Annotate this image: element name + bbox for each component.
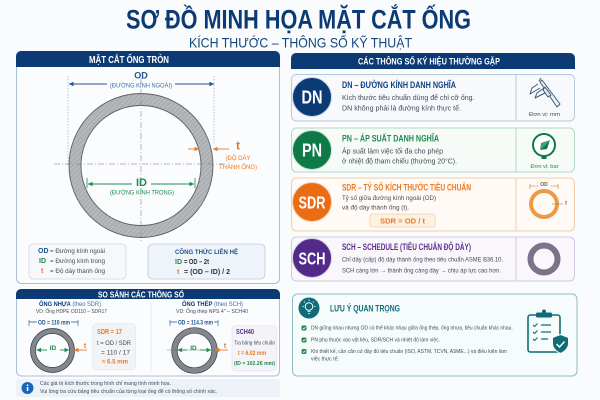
legend box: ID — [39, 258, 46, 265]
plastic pipe heading — [36, 298, 107, 315]
info note — [16, 379, 280, 397]
panel: pipe cross-section — [16, 51, 280, 284]
card: DN: Đơn vị: mm — [529, 112, 560, 118]
card: SCH: SCH càng lớn → thành ống càng dày → chịu áp lực cao hơn. — [342, 266, 501, 275]
right heading: CÁC THÔNG SỐ KÝ HIỆU THƯỜNG GẶP — [358, 56, 501, 68]
SCH40 box: (ID = 102.26 mm) — [234, 361, 275, 367]
comparison heading — [16, 288, 280, 300]
SCH badge — [292, 238, 332, 278]
plastic pipe heading: VD: Ống HDPE OD110 – SDR17 — [36, 308, 107, 315]
SCH40 box: SCH40 — [236, 329, 254, 336]
SDR formula — [370, 214, 435, 227]
steel pipe heading: VD: Ống thép NPS 4" – SCH40 — [176, 308, 248, 315]
ID dimension — [87, 177, 195, 196]
wall thickness t: THÀNH ỐNG) — [219, 164, 257, 171]
icon: caliper — [530, 78, 560, 107]
panel: comparison — [16, 288, 280, 376]
plastic pipe ring: OD = 110 mm — [38, 320, 70, 326]
card: PN — [292, 128, 574, 172]
SDR calculation box — [92, 324, 136, 370]
note list: DN giống nhau nhưng OD có thể khác nhau giữa ống thép, ống nhựa, tiêu chuẩn khác nhau. — [311, 324, 513, 332]
plastic pipe ring: ID — [50, 345, 57, 352]
note list: Khi thiết kế, cần căn cứ đầy đủ tiêu chuẩn (ISO, ASTM, TCVN, ASME...) và điều kiện làm — [311, 348, 507, 355]
legend box: = Đường kính ngoài — [50, 248, 105, 255]
SDR badge: SDR — [298, 192, 326, 212]
panel: important notes — [292, 294, 577, 376]
note list — [302, 324, 513, 363]
SDR calculation box: ≈ 6.5 mm — [102, 358, 128, 366]
card: PN: PN – ÁP SUẤT DANH NGHĨA — [342, 134, 439, 144]
card: SCH: Chỉ dày (cấp) độ dày thành ống theo tiêu chuẩn ASME B36.10. — [342, 255, 503, 264]
formula box: = (OD – ID) / 2 — [184, 269, 230, 276]
plastic pipe ring — [29, 320, 87, 372]
info note: Các giá trị kích thước trong hình chỉ mang tính minh họa. — [40, 380, 171, 387]
plastic pipe heading: ỐNG NHỰA (theo SDR) — [39, 298, 101, 308]
card: SDR — [292, 178, 574, 231]
right heading — [291, 53, 575, 69]
card: SDR: SDR – TỶ SỐ KÍCH THƯỚC TIÊU CHUẨN — [342, 181, 471, 192]
DN badge: DN — [302, 88, 322, 108]
icon: info — [22, 382, 34, 394]
legend box: = Đường kính trong — [50, 258, 105, 265]
steel pipe heading — [176, 298, 248, 315]
formula box: CÔNG THỨC LIÊN HỆ — [175, 247, 239, 256]
ID dimension: (ĐƯỜNG KÍNH TRONG) — [110, 190, 174, 196]
formula box: t — [177, 269, 180, 276]
wall thickness t: (ĐỘ DÀY — [225, 155, 251, 162]
panel: important notes: LƯU Ý QUAN TRỌNG — [330, 303, 400, 315]
SDR calculation box: SDR = 17 — [97, 329, 122, 336]
plastic pipe ring: t — [84, 343, 87, 350]
panel heading — [16, 51, 280, 67]
icon: light bulb — [298, 298, 320, 318]
card: SCH: SCH – SCHEDULE (TIÊU CHUẨN ĐỘ DÀY) — [342, 241, 471, 252]
SCH40 box: Tra bảng tiêu chuẩn — [234, 340, 275, 346]
wall thickness t — [188, 138, 257, 171]
icon: thick ring — [530, 246, 558, 272]
legend box — [29, 244, 126, 279]
card: SDR: và độ dày thành ống (t). — [342, 202, 409, 212]
formula box: = OD – 2t — [184, 259, 210, 266]
DN badge — [292, 78, 332, 116]
wall thickness t: t — [236, 138, 240, 152]
SDR badge — [292, 182, 332, 222]
SCH badge: SCH — [298, 248, 326, 268]
SDR calculation box: t = OD / SDR — [97, 340, 131, 347]
pipe ring diagram — [54, 78, 225, 243]
icon: SDR ring — [530, 182, 567, 217]
card: PN: Áp suất làm việc tối đa cho phép — [342, 147, 443, 156]
card: PN: Đơn vị: bar — [530, 164, 559, 170]
icon: pressure gauge — [533, 134, 555, 159]
card: DN — [292, 74, 574, 121]
formula box — [148, 244, 265, 279]
card: SDR: Tỷ số giữa đường kính ngoài (OD) — [342, 193, 436, 202]
card: DN: DN – ĐƯỜNG KÍNH DANH NGHĨA — [342, 79, 456, 90]
legend box: = Độ dày thành ống — [50, 266, 105, 275]
OD dimension: (ĐƯỜNG KÍNH NGOÀI) — [110, 82, 172, 90]
SDR calculation box: = 110 / 17 — [101, 350, 130, 356]
SDR formula: SDR = OD / t — [380, 216, 425, 226]
SCH40 box: t = 6.02 mm — [238, 350, 266, 357]
card: PN: ở nhiệt độ tham chiếu (thường 20°C). — [342, 156, 457, 166]
steel pipe ring — [167, 320, 228, 373]
card: DN: Kích thước tiêu chuẩn dùng để chỉ cỡ ống. — [342, 93, 475, 102]
steel pipe ring: ID — [190, 345, 197, 352]
title: SƠ ĐỒ MINH HỌA MẶT CẮT ỐNG — [126, 2, 471, 34]
legend box: t — [41, 268, 44, 275]
SCH40 box — [232, 326, 276, 371]
PN badge: PN — [302, 140, 322, 160]
formula box: ID — [175, 259, 182, 266]
comparison heading: SO SÁNH CÁC THÔNG SỐ — [98, 288, 184, 300]
icon: SDR ring: t — [565, 200, 567, 206]
panel heading: MẶT CẮT ỐNG TRÒN — [89, 52, 169, 66]
title — [126, 2, 471, 50]
OD dimension: OD — [134, 70, 148, 80]
subtitle: KÍCH THƯỚC – THÔNG SỐ KỸ THUẬT — [189, 34, 412, 50]
note list: việc thực tế. — [311, 357, 339, 363]
ID dimension: ID — [136, 177, 147, 189]
steel pipe ring: OD = 114.3 mm — [178, 320, 213, 326]
note list: PN phụ thuộc vào vật liệu, SDR/SCH và nhiệt độ làm việc. — [311, 338, 440, 344]
info note: Vui lòng tra cứu bảng tiêu chuẩn của từng loại ống để có thông số chính xác. — [40, 388, 217, 395]
PN badge — [292, 130, 332, 170]
icon: SDR ring: OD — [540, 182, 548, 188]
card: DN: DN không phải là đường kính thực tế. — [342, 104, 461, 112]
steel pipe heading: ỐNG THÉP (theo SCH) — [182, 298, 243, 308]
steel pipe ring: t — [224, 343, 227, 350]
card: SCH — [292, 237, 574, 281]
icon: clipboard with shield — [528, 310, 568, 354]
legend box: OD — [38, 248, 48, 255]
OD dimension — [68, 70, 214, 165]
